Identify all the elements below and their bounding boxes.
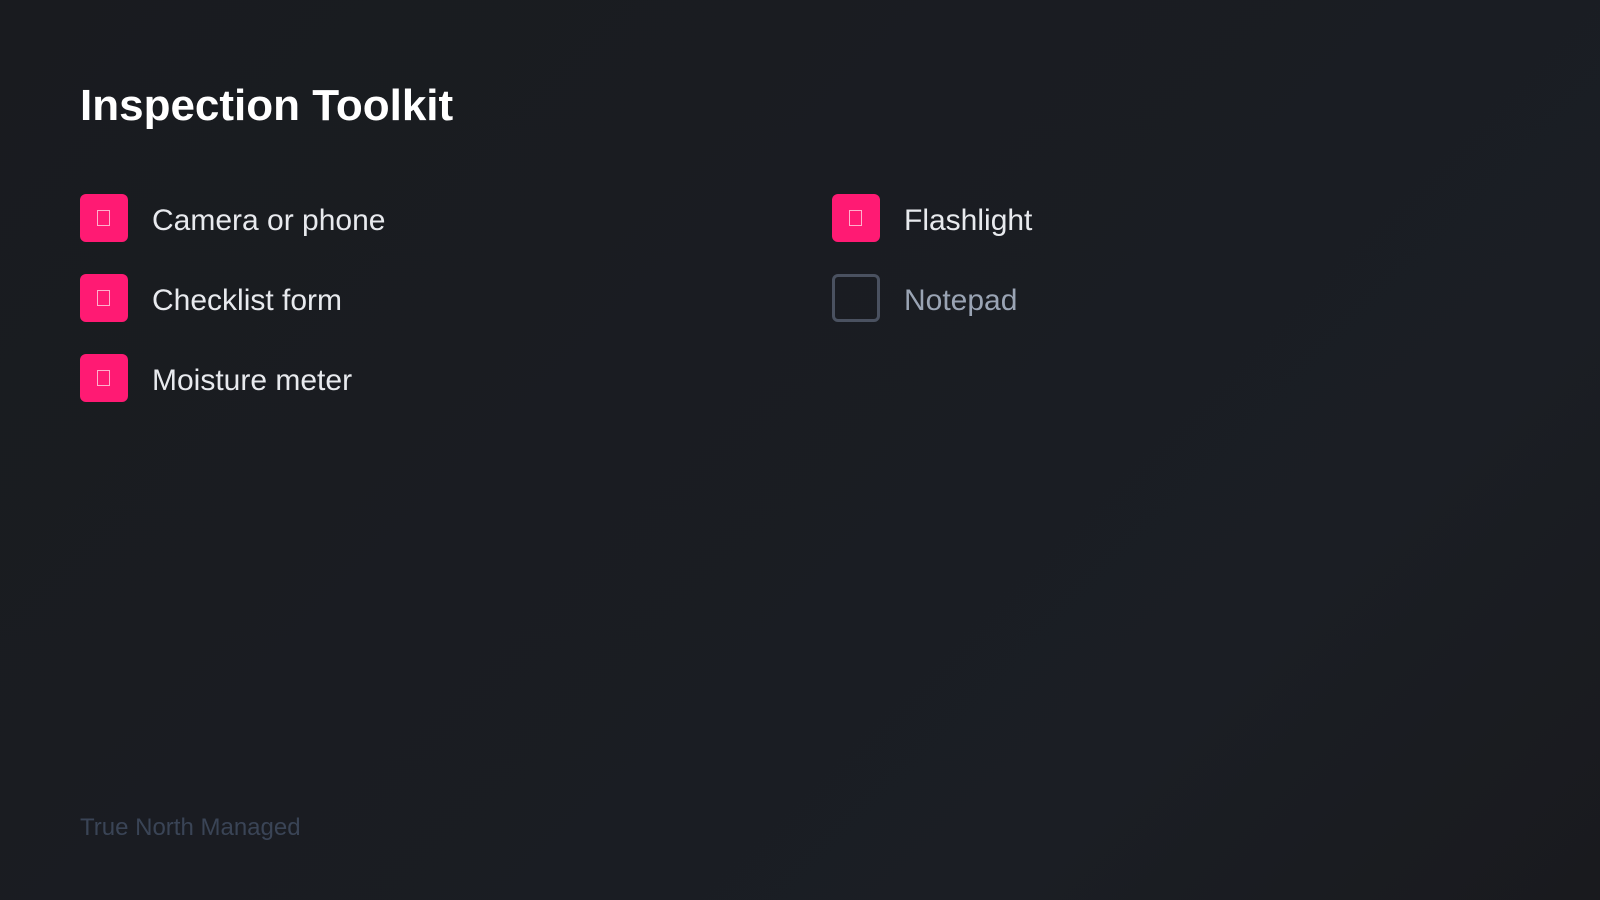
- item: checklist form: Checklist form: [152, 284, 342, 317]
- item: camera or phone: Camera or phone: [152, 204, 385, 237]
- item: moisture meter: Moisture meter: [152, 364, 352, 397]
- item: notepad (unchecked): Notepad: [904, 284, 1017, 317]
- item: notepad (unchecked): [832, 274, 1017, 322]
- footer: True North Managed: [80, 814, 301, 841]
- item: flashlight: [832, 194, 1032, 242]
- item: flashlight: Flashlight: [904, 204, 1032, 237]
- title: Inspection Toolkit: [80, 81, 453, 130]
- item: checklist form: [80, 274, 342, 322]
- item: camera or phone: [80, 194, 385, 242]
- item: moisture meter: [80, 354, 352, 402]
